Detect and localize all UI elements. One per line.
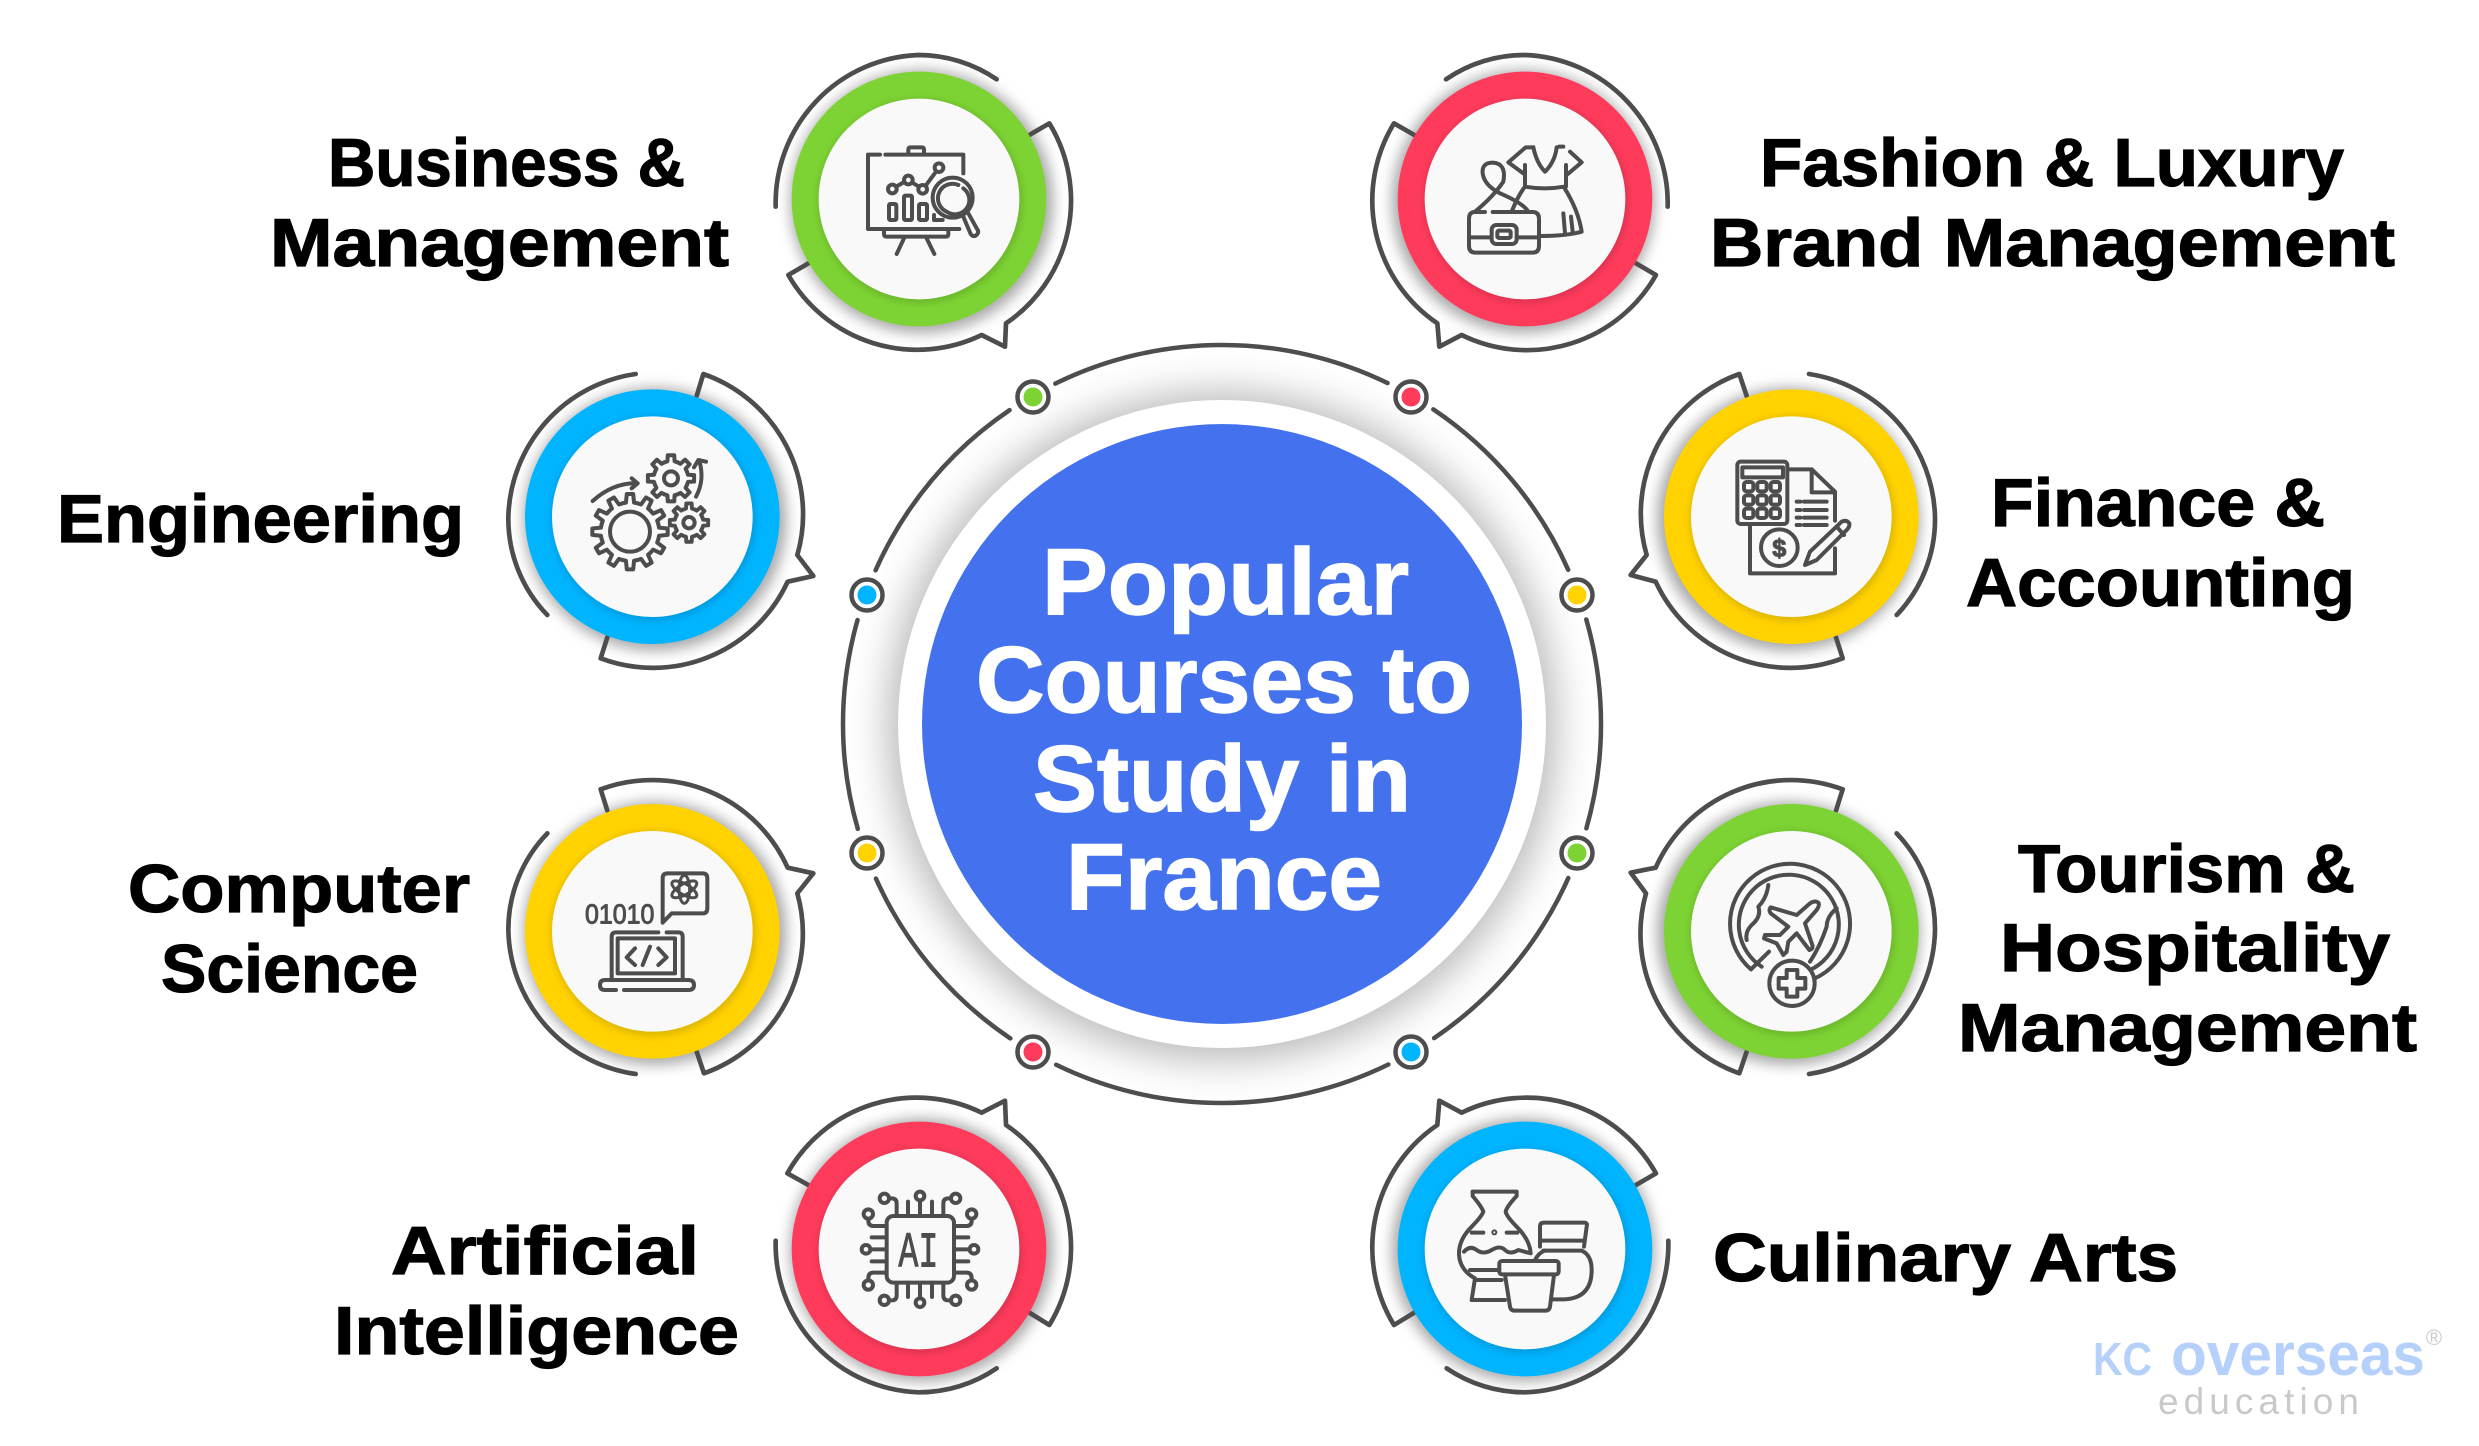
label: Business & Management: Management xyxy=(270,205,729,281)
hub outline ring xyxy=(696,198,1748,1250)
hub shadow xyxy=(888,392,1556,1060)
label: Finance & Accounting: Accounting xyxy=(1966,545,2355,621)
label: Tourism & Hospitality Management: Tourism & xyxy=(2018,831,2355,907)
ring: blue xyxy=(525,389,780,644)
icon: gears xyxy=(592,455,708,569)
icon: laptop with code xyxy=(585,873,707,990)
ring: green xyxy=(792,72,1046,326)
logo: KC Overseas Education: ® xyxy=(2426,1325,2442,1350)
ring: blue xyxy=(1398,1122,1652,1376)
label: Artificial Intelligence: Intelligence xyxy=(334,1293,739,1369)
label: Business & Management: Business & xyxy=(328,125,685,201)
label: Engineering: Engineering xyxy=(57,481,464,557)
label: Artificial Intelligence: Artificial xyxy=(391,1213,699,1289)
outline: culinary xyxy=(1372,1098,1668,1392)
icon: AI chip xyxy=(862,1192,978,1307)
label: Fashion & Luxury Brand Management: Fashion & Luxury xyxy=(1760,125,2344,201)
outline: computer xyxy=(508,780,813,1074)
label: Computer Science xyxy=(128,851,470,1007)
outline: finance xyxy=(1631,374,1935,668)
icon: calculator and invoice: $ xyxy=(1772,535,1786,563)
logo: KC Overseas Education: KC xyxy=(2093,1333,2152,1385)
logo: KC Overseas Education xyxy=(2093,1321,2442,1422)
title: France xyxy=(1066,824,1382,929)
title: Popular xyxy=(1042,529,1409,634)
hub white disc xyxy=(898,400,1546,1048)
title: Courses to xyxy=(976,627,1472,732)
label: Computer Science: Computer xyxy=(128,851,470,927)
outline: AI xyxy=(776,1098,1071,1392)
label: Culinary Arts: Culinary Arts xyxy=(1713,1220,2178,1296)
hub blue disc xyxy=(922,424,1522,1024)
label: Computer Science: Science xyxy=(161,931,418,1007)
label: Artificial Intelligence xyxy=(334,1213,739,1369)
outline: business xyxy=(776,55,1071,350)
icon: dress and handbag xyxy=(1469,147,1582,253)
connector dots on hub ring xyxy=(852,382,1592,1068)
icon: pottery xyxy=(1459,1192,1592,1311)
badge: Fashion & Luxury xyxy=(1372,55,1668,350)
badge: Business & Management xyxy=(776,55,1071,350)
icon: globe with airplane xyxy=(1730,864,1850,1006)
label: Finance & Accounting xyxy=(1966,465,2355,621)
icon: AI chip: AI xyxy=(898,1226,938,1283)
label: Tourism & Hospitality Management: Management xyxy=(1958,990,2417,1066)
label: Fashion & Luxury Brand Management xyxy=(1710,125,2395,281)
title: Study in xyxy=(1033,726,1411,831)
ring: yellow xyxy=(1664,389,1919,644)
ring: green xyxy=(1664,804,1919,1059)
label: Finance & Accounting: Finance & xyxy=(1991,465,2325,541)
label: Tourism & Hospitality Management: Hospitality xyxy=(2000,910,2390,986)
logo: KC Overseas Education: education xyxy=(2158,1381,2359,1422)
icon: calculator and invoice xyxy=(1737,462,1849,573)
label: Tourism & Hospitality Management xyxy=(1958,831,2417,1066)
panel: central hub xyxy=(696,198,1748,1250)
logo: KC Overseas Education: overseas xyxy=(2171,1321,2425,1388)
badge: Engineering xyxy=(508,374,813,668)
label: Business & Management xyxy=(270,125,729,281)
title xyxy=(976,529,1472,929)
icon: presentation board with magnifier xyxy=(868,147,978,254)
ring: yellow xyxy=(525,804,780,1059)
outline: fashion xyxy=(1372,55,1668,350)
badge: Culinary Arts xyxy=(1372,1098,1668,1392)
icon: laptop with code: 01010 xyxy=(585,898,654,929)
badge: Computer Science xyxy=(508,780,813,1074)
outline: tourism xyxy=(1631,780,1935,1074)
outline: engineering xyxy=(508,374,813,668)
ring: red xyxy=(792,1122,1046,1376)
label: Fashion & Luxury Brand Management: Brand Management xyxy=(1710,205,2395,281)
ring: red xyxy=(1398,72,1652,326)
badge: Finance & Accounting xyxy=(1631,374,1935,668)
badge: Tourism & Hospitality xyxy=(1631,780,1935,1074)
badge: Artificial Intelligence xyxy=(776,1098,1071,1392)
